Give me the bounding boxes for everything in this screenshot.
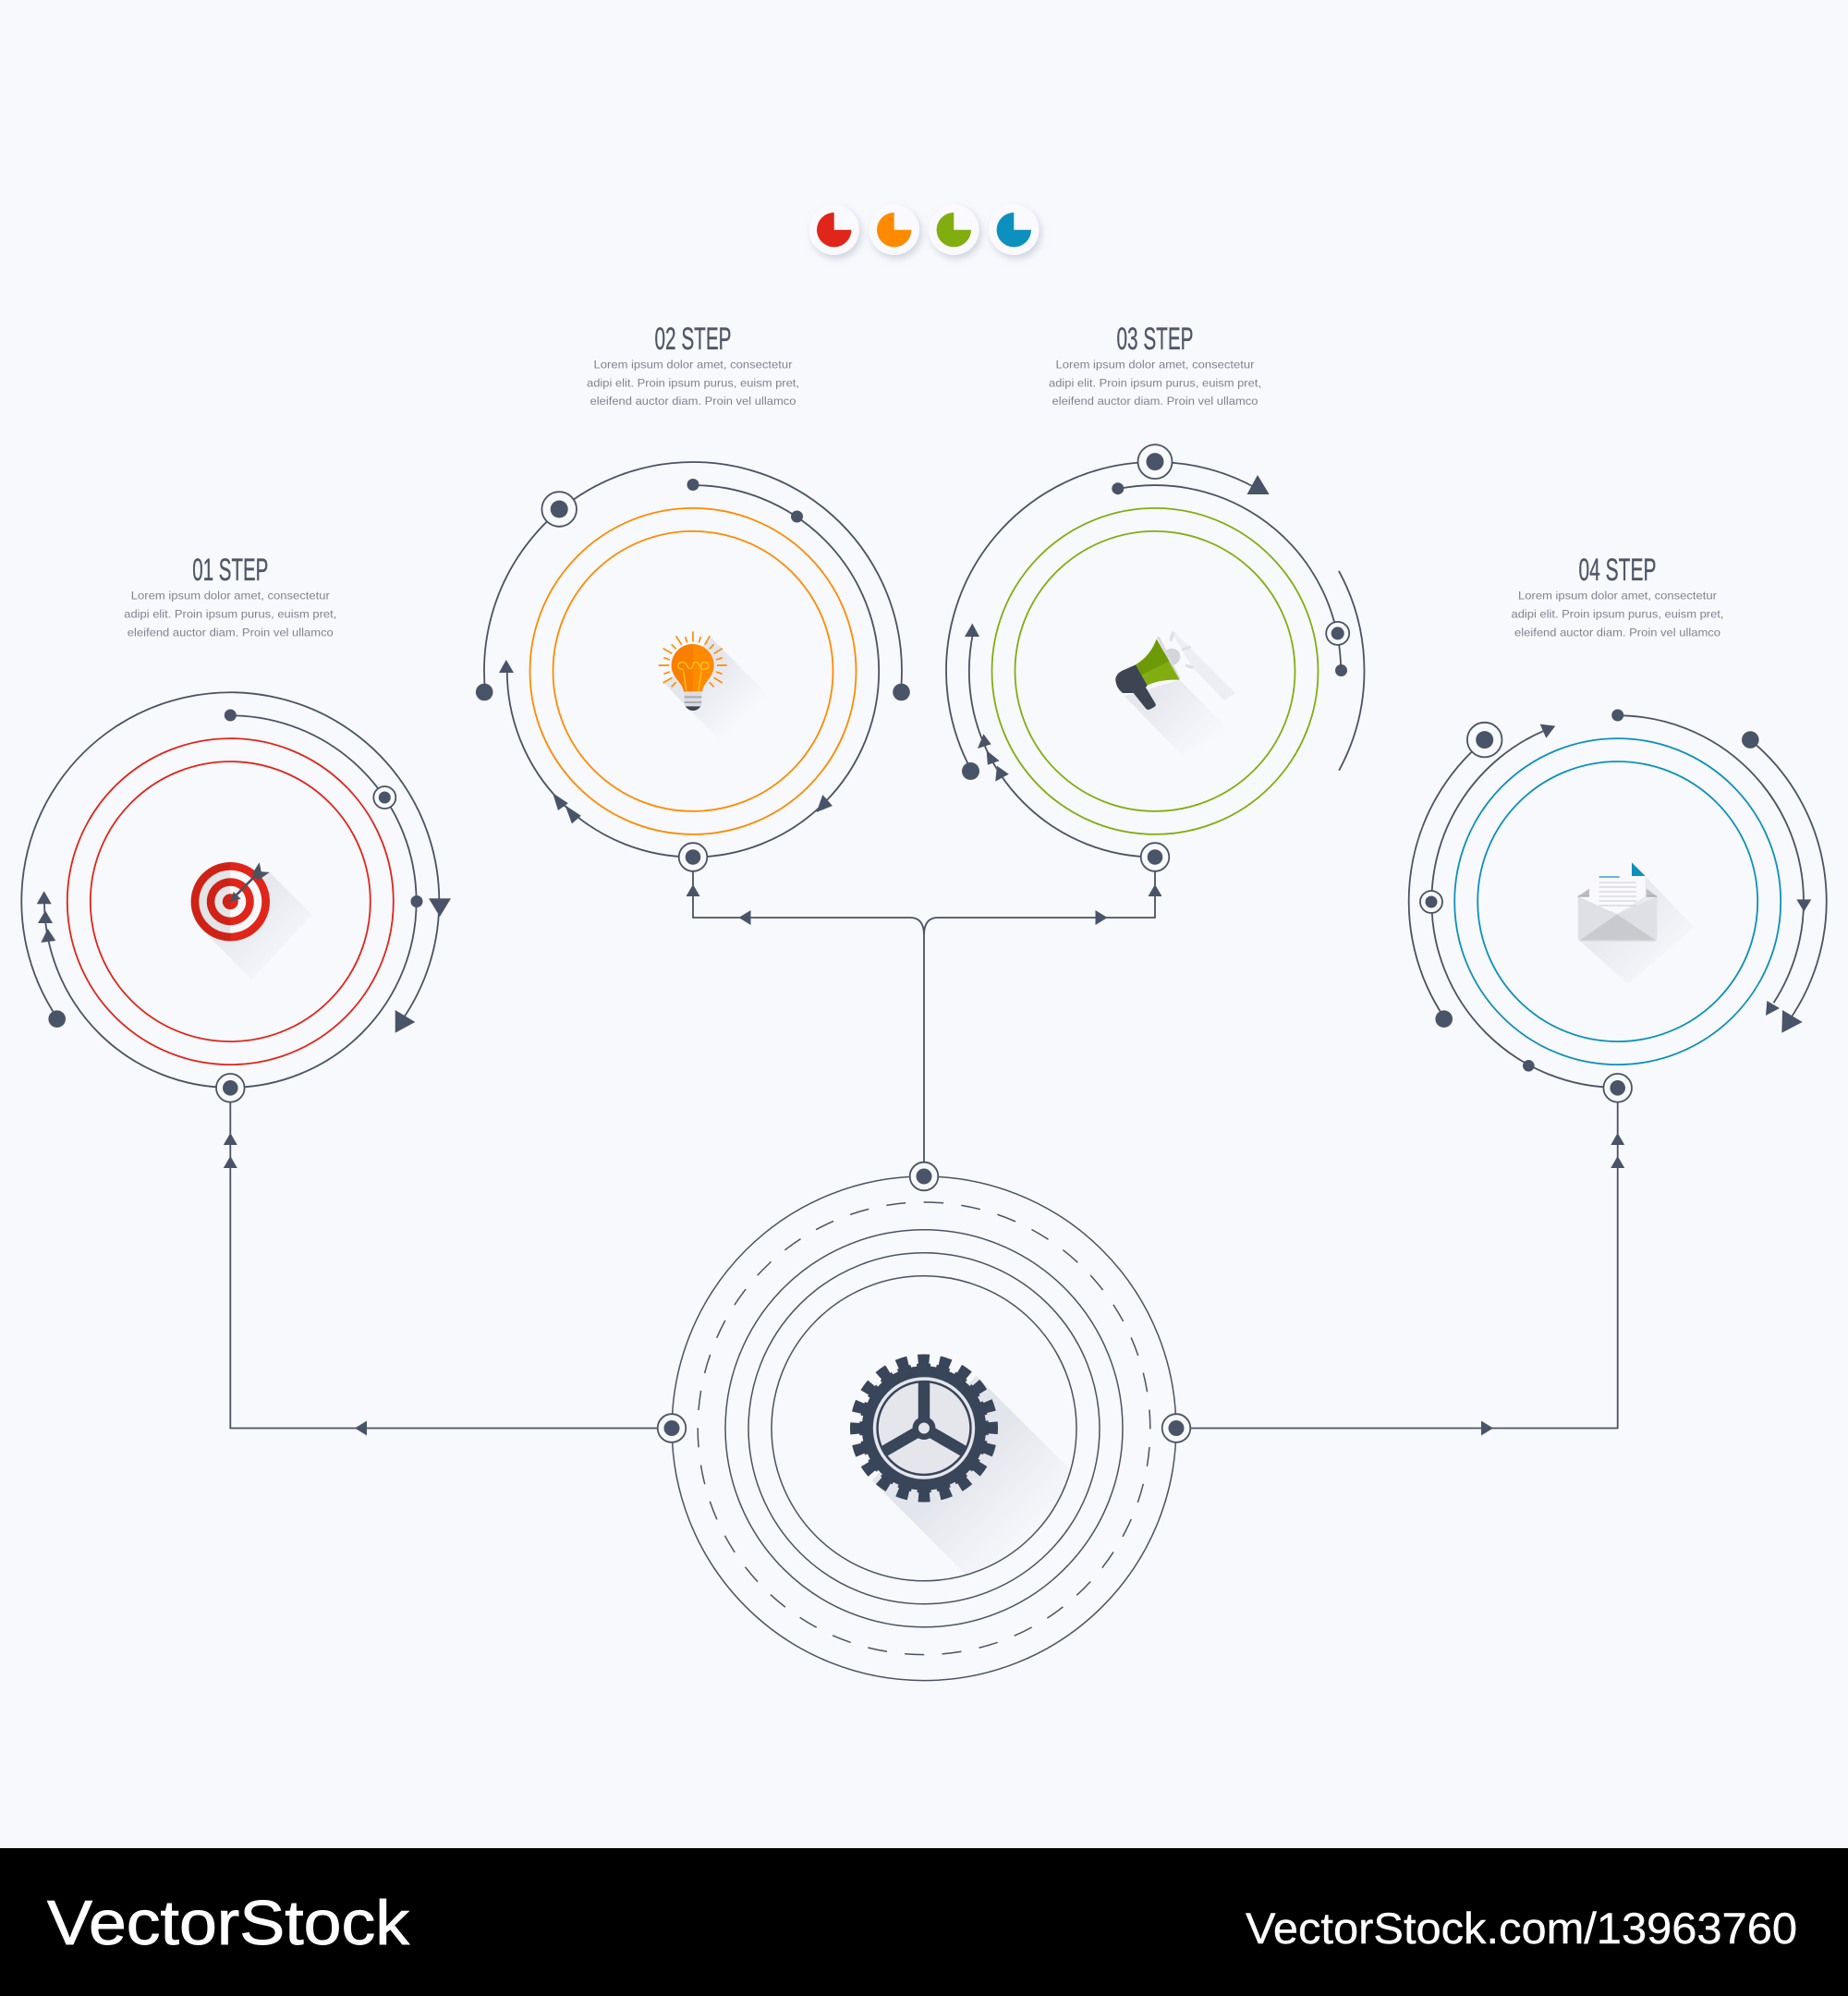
icon: target with arrow [191, 862, 270, 941]
orbit arrows [499, 660, 833, 823]
step 02 description: Lorem ipsum dolor amet, consectetur [593, 359, 793, 371]
bottom node [1603, 1074, 1632, 1102]
footer url: VectorStock.com/13963760 [1246, 1904, 1797, 1953]
step 01 description: Lorem ipsum dolor amet, consectetur [131, 590, 330, 602]
footer logo text: VectorStock [47, 1888, 410, 1958]
legend: four pie buttons [808, 204, 1040, 255]
bottom node [1141, 843, 1169, 871]
step 03 title: 03 STEP [1116, 322, 1194, 357]
hub node right [1162, 1414, 1190, 1442]
arrow right [1096, 910, 1107, 925]
bulb base [685, 691, 701, 711]
right node [1326, 622, 1349, 645]
connector: hub to steps 02 and 03 [686, 858, 1162, 1166]
orbit dots [962, 482, 1347, 780]
step 04 title: 04 STEP [1578, 553, 1656, 588]
connector: hub to step 01 [224, 1089, 672, 1436]
letter lines [1599, 877, 1636, 906]
arrow up [1611, 1156, 1624, 1168]
gear long shadow [871, 1376, 1071, 1576]
orbit node [373, 786, 395, 809]
envelope back flaps [1578, 889, 1657, 896]
bulb rays [659, 631, 727, 687]
pie button green [929, 204, 979, 255]
step 04 description [1512, 590, 1724, 639]
sound hole [1163, 649, 1180, 665]
step 01 description: adipi elit. Proin ipsum purus, euism pret, [124, 608, 336, 621]
left node [1420, 891, 1442, 913]
top node [1138, 444, 1172, 479]
arrow up [224, 1156, 237, 1168]
orbit arcs [0, 612, 520, 1191]
step 03 description [1049, 359, 1261, 408]
bulb long shadow [665, 638, 774, 748]
megaphone body and handle [1115, 664, 1156, 710]
pie button orange [869, 204, 919, 255]
arrow right [1481, 1421, 1493, 1436]
icon: envelope with letter [1578, 862, 1657, 942]
step 03 description: adipi elit. Proin ipsum purus, euism pret, [1049, 377, 1261, 390]
orbit dots [48, 710, 423, 1028]
blue rings [1454, 738, 1781, 1065]
panel: step 01 [0, 553, 520, 1191]
envelope long shadow [1580, 876, 1694, 984]
step 04 description: eleifend auctor diam. Proin vel ullamco [1514, 626, 1720, 639]
arrow up [224, 1133, 237, 1145]
step 01 description: eleifend auctor diam. Proin vel ullamco [128, 626, 334, 639]
arrow up to step 03 [1148, 884, 1162, 896]
icon: light bulb [659, 631, 727, 711]
orbit arrows [1540, 724, 1811, 1033]
step 02 description: adipi elit. Proin ipsum purus, euism pret, [587, 377, 799, 390]
orbit dots [1435, 710, 1759, 1072]
panel: step 03 [872, 322, 1439, 954]
step 01 description [124, 590, 336, 639]
target long shadow [202, 870, 312, 980]
orbit arcs [464, 442, 922, 900]
pie button red [808, 204, 859, 255]
arrow left [739, 910, 750, 925]
step 01 title: 01 STEP [192, 553, 268, 588]
green horn [1136, 639, 1180, 686]
hub node left [658, 1414, 686, 1442]
orbit node [541, 492, 577, 527]
panel: step 02 [464, 322, 922, 900]
bottom node [216, 1074, 245, 1102]
bulb filament [678, 663, 709, 690]
orbit dots [476, 479, 910, 700]
orbit arrows [965, 475, 1270, 782]
step 04 description: adipi elit. Proin ipsum purus, euism pret, [1512, 608, 1724, 621]
arrow left [355, 1421, 367, 1436]
hub node top [910, 1162, 938, 1190]
letter corner [1632, 862, 1646, 876]
upper-left node [1467, 723, 1502, 757]
icon: megaphone [1115, 633, 1192, 710]
step 02 description: eleifend auctor diam. Proin vel ullamco [590, 395, 796, 408]
arrow up to step 02 [686, 884, 700, 896]
arrow up [1611, 1133, 1624, 1145]
step 03 description: Lorem ipsum dolor amet, consectetur [1055, 359, 1255, 371]
horn lip [1157, 637, 1180, 680]
step 02 title: 02 STEP [654, 322, 732, 357]
hub rings [672, 1176, 1176, 1681]
footer band [0, 1848, 1848, 1996]
red rings [67, 738, 394, 1065]
orbit arrows [37, 891, 451, 1033]
panel: step 04 [1324, 553, 1848, 1195]
panel: central hub [658, 1162, 1190, 1681]
letter [1589, 862, 1646, 914]
step 03 description: eleifend auctor diam. Proin vel ullamco [1052, 395, 1258, 408]
green rings [992, 508, 1318, 834]
pie button blue [989, 204, 1040, 255]
orbit arcs [872, 388, 1439, 954]
sound marks [1171, 633, 1192, 667]
step 04 description: Lorem ipsum dolor amet, consectetur [1518, 590, 1717, 602]
icon: gear [850, 1355, 998, 1502]
step 02 description [587, 359, 799, 408]
envelope front [1578, 896, 1657, 942]
bulb glass [672, 644, 714, 691]
connector: hub to step 04 [1176, 1089, 1624, 1436]
orbit arcs [1324, 607, 1848, 1195]
orange rings [530, 508, 856, 834]
megaphone long shadow [1125, 631, 1235, 754]
bottom node [679, 843, 707, 871]
